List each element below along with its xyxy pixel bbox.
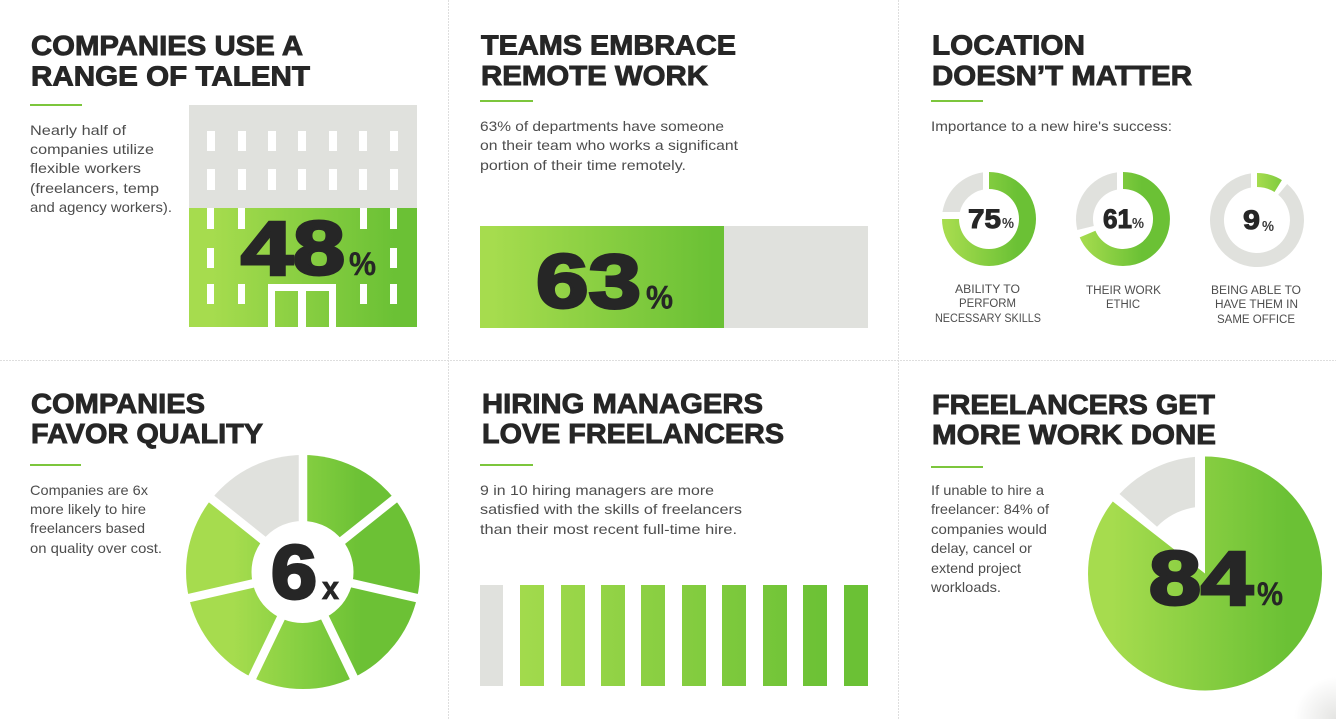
text block: departments <box>480 118 738 173</box>
text block: flexible workers: flexible workers <box>30 160 141 176</box>
text block: flexible workers: and agency workers). <box>30 199 172 215</box>
text block: 9 in 10: satisfied with the skills of freelancers <box>480 501 742 517</box>
text block: 9 in 10: 9 in 10 hiring managers are more <box>480 482 714 498</box>
text block: 9 in 10 <box>480 482 742 537</box>
heading: teams embrace remote work: REMOTE WORK <box>481 60 708 91</box>
label: ability to perform necessary skills: ABILITY TO <box>955 284 1020 296</box>
chart: segmented wheel 6x <box>181 447 425 689</box>
text block: quality over cost: more likely to hire <box>30 501 146 517</box>
number: 48 percent: 48 <box>241 206 345 292</box>
number: 84 percent <box>1149 536 1283 622</box>
donut: 9 percent: % <box>1262 218 1274 235</box>
heading: teams embrace remote work: TEAMS EMBRACE <box>481 30 736 60</box>
donut: 61 percent: % <box>1132 215 1144 232</box>
label: their work ethic: ETHIC <box>1106 299 1140 311</box>
text block: unable to hire: workloads. <box>930 579 1001 595</box>
number: 48 percent <box>241 206 376 292</box>
donut: 61 percent: 61 <box>1103 204 1132 234</box>
heading: companies favor quality: FAVOR QUALITY <box>31 418 263 449</box>
text block: flexible workers <box>30 122 172 215</box>
text block: departments: portion of their time remotely. <box>480 157 686 173</box>
text block: quality over cost: Companies are 6x <box>30 482 148 498</box>
text block: flexible workers: companies utilize <box>30 141 154 157</box>
panel: teams embrace remote work <box>480 30 868 328</box>
label: ability to perform necessary skills: NECESSARY SKILLS <box>935 313 1041 325</box>
number: 63 percent: 63 <box>536 240 641 324</box>
heading: hiring managers love freelancers: LOVE FREELANCERS <box>482 418 784 449</box>
label: being able to have them in same office: HAVE THEM IN <box>1215 299 1298 311</box>
panel: location doesn't matter <box>931 30 1304 326</box>
label: ability to perform necessary skills <box>935 284 1041 325</box>
donut: 75 percent: % <box>1002 215 1014 232</box>
number: 63 percent <box>536 240 673 324</box>
text block: importance: Importance to a new hire's success: <box>931 118 1172 134</box>
heading: freelancers get more work done: FREELANCERS GET <box>932 389 1215 420</box>
number: 84 percent: 84 <box>1149 536 1253 622</box>
heading: location doesn't matter: DOESN’T MATTER <box>932 60 1192 91</box>
panel: companies favor quality <box>30 388 425 689</box>
donut: 75 percent <box>942 172 1036 266</box>
number: 84 percent: % <box>1257 576 1283 612</box>
donut: 75 percent: 75 <box>968 204 1001 234</box>
heading: hiring managers love freelancers: HIRING MANAGERS <box>482 388 763 419</box>
chart: building 48 percent <box>189 105 417 327</box>
heading: teams embrace remote work <box>481 30 736 91</box>
heading: location doesn't matter <box>932 30 1192 91</box>
number: 63 percent: % <box>646 280 673 316</box>
text block: unable to hire: extend project <box>931 560 1021 576</box>
heading: companies favor quality <box>31 388 263 449</box>
text block: departments: on their team who works a significant <box>480 137 738 153</box>
text block: unable to hire: delay, cancel or <box>931 540 1032 556</box>
text block: flexible workers: (freelancers, temp <box>30 180 159 196</box>
text block: flexible workers: Nearly half of <box>30 122 126 138</box>
heading: companies use a range of talent <box>31 30 310 92</box>
panel: freelancers get more work done <box>930 389 1322 690</box>
heading: freelancers get more work done <box>932 389 1216 450</box>
text block: unable to hire <box>930 482 1049 595</box>
label: their work ethic: THEIR WORK <box>1086 285 1161 297</box>
text block: quality over cost: freelancers based <box>30 520 145 536</box>
text block: unable to hire: companies would <box>931 521 1047 537</box>
heading: companies use a range of talent: COMPANIES USE A <box>31 30 303 61</box>
heading: location doesn't matter: LOCATION <box>932 30 1085 60</box>
number: 48 percent: % <box>349 246 376 282</box>
label: being able to have them in same office: BEING ABLE TO <box>1211 285 1301 297</box>
panel: companies use a range of talent <box>30 30 417 327</box>
heading: hiring managers love freelancers <box>482 388 784 449</box>
text block: quality over cost <box>30 482 162 556</box>
text block: quality over cost: on quality over cost. <box>30 540 162 556</box>
chart: ten bars <box>480 585 868 686</box>
heading: companies use a range of talent: RANGE OF TALENT <box>31 60 310 92</box>
number: 6x <box>271 530 339 616</box>
donut: 9 percent: 9 <box>1243 205 1260 235</box>
heading: companies favor quality: COMPANIES <box>31 388 205 419</box>
heading: freelancers get more work done: MORE WORK DONE <box>932 419 1216 450</box>
label: being able to have them in same office: SAME OFFICE <box>1217 314 1295 326</box>
label: their work ethic <box>1086 285 1161 311</box>
number: 6x: x <box>322 570 339 606</box>
donut: 9 percent <box>1210 173 1304 267</box>
panel: hiring managers love freelancers <box>480 388 868 686</box>
chart: pie 84 percent <box>1088 456 1322 690</box>
text block: departments: 63% of departments have someone <box>480 118 724 134</box>
number: 6x: 6 <box>271 530 317 616</box>
donut: 61 percent <box>1076 172 1170 266</box>
text block: unable to hire: freelancer: 84% of <box>931 501 1049 517</box>
text block: unable to hire: If unable to hire a <box>931 482 1044 498</box>
text block: 9 in 10: than their most recent full-time hire. <box>480 521 737 537</box>
label: ability to perform necessary skills: PERFORM <box>959 298 1016 310</box>
label: being able to have them in same office <box>1211 285 1301 326</box>
chart: progress bar 63 percent <box>480 226 868 328</box>
